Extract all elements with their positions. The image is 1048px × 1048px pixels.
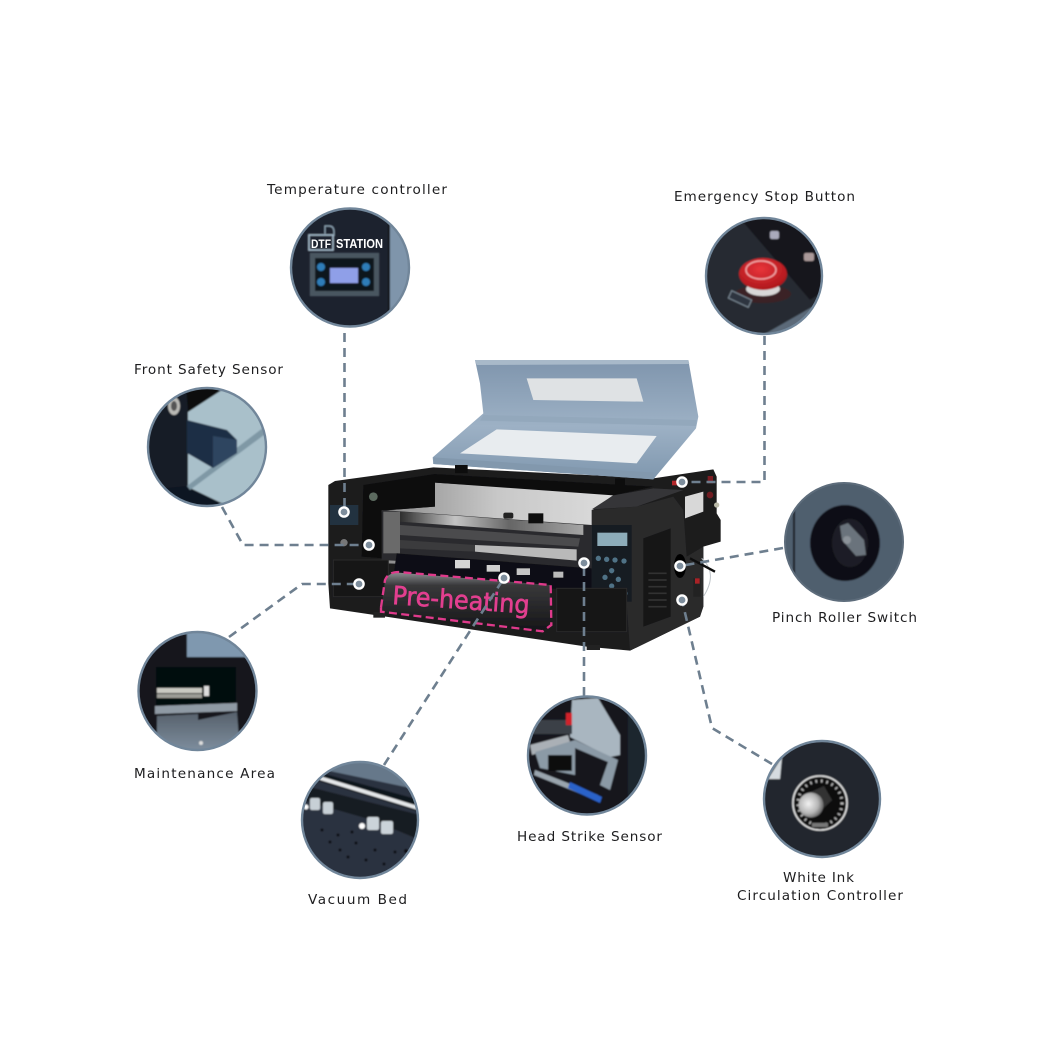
logo wordmark: STATION (336, 237, 383, 251)
ring (764, 741, 880, 857)
panel: maintenance area (134, 630, 275, 782)
printer lid (433, 360, 698, 486)
connector: head strike sensor (583, 563, 585, 696)
panel: front safety sensor (134, 362, 283, 512)
interior back panel (382, 483, 615, 570)
printer body (328, 467, 721, 651)
photo: maintenance bay (137, 630, 259, 752)
connector: vacuum bed (384, 578, 504, 765)
connector anchor dots (339, 477, 687, 605)
ring (291, 208, 409, 326)
pre-heating label: Pre-heating (392, 580, 531, 620)
ring (528, 696, 646, 814)
connector: maintenance area (229, 584, 359, 637)
photo: stop button (707, 219, 821, 333)
dashed highlight outline (381, 572, 551, 631)
right side details (672, 476, 719, 597)
panel: vacuum bed (300, 759, 422, 908)
ring (785, 483, 903, 601)
photo: sensor (149, 389, 265, 505)
left temperature panel on body (330, 492, 627, 632)
heading line two: Circulation Controller (737, 888, 903, 904)
heading: Temperature controller (266, 182, 447, 198)
panel: white ink circulation controller (737, 739, 903, 904)
photo: switch (783, 481, 905, 603)
photo: dial (765, 742, 879, 856)
photo: sensor bracket (529, 698, 645, 814)
panel: head strike sensor (517, 695, 662, 845)
connector: white ink circulation controller (682, 600, 772, 764)
heading: Pinch Roller Switch (772, 610, 917, 626)
connector: temperature controller (343, 333, 346, 512)
logo text: DTF (311, 237, 331, 251)
printer illustration (328, 360, 721, 651)
heading: Emergency Stop Button (674, 189, 855, 205)
connector: front safety sensor (222, 507, 369, 545)
panel: emergency stop button (674, 189, 855, 340)
heading: Front Safety Sensor (134, 362, 283, 378)
carriage rails (382, 510, 592, 572)
pre-heating callout (381, 572, 551, 631)
connector: emergency stop button (682, 336, 764, 482)
ring (302, 762, 418, 878)
photo: vacuum bed (303, 763, 417, 877)
connector: pinch roller switch (680, 548, 783, 566)
control panel housing (592, 488, 703, 651)
photo: controller (292, 210, 408, 326)
heading: Maintenance Area (134, 766, 275, 782)
panel: temperature controller (266, 182, 447, 330)
ring (148, 388, 266, 506)
feet (373, 612, 600, 650)
platen and rollers (393, 553, 592, 592)
ring (706, 218, 822, 334)
heading: Head Strike Sensor (517, 829, 662, 845)
heading line one: White Ink (783, 870, 854, 886)
panel: pinch roller switch (772, 481, 917, 626)
pre-heating roller cover (382, 573, 551, 631)
heading: Vacuum Bed (308, 892, 407, 908)
ring (138, 632, 256, 750)
infographic: DTF printer feature callouts (135, 184, 916, 904)
